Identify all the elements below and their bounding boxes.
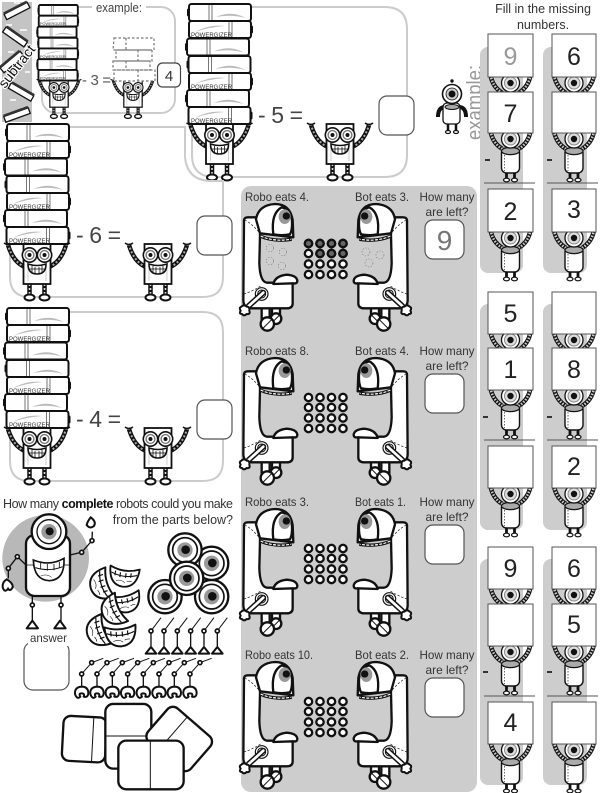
answer box (197, 400, 232, 439)
column 2: 6 - 5 = blank: 5 (567, 611, 581, 639)
question: how many complete robots: from the parts below? (113, 513, 233, 527)
body (26, 535, 70, 596)
question: how many complete robots: How many complete robots could you make (3, 497, 233, 511)
robot holding seven batteries: POWERGIZER (191, 85, 233, 91)
heading: fill in the missing numbers: Fill in the missing (495, 2, 591, 16)
parts: arms (75, 658, 212, 698)
answer box (379, 96, 414, 135)
column 2: 6 - 5 = blank (547, 547, 598, 793)
subtraction block 2 (480, 292, 598, 537)
robot holding seven batteries (36, 5, 81, 118)
grey bands (480, 47, 587, 273)
row 1: Robo eats 4, Bot eats 3: How many (420, 190, 474, 204)
robot holding seven batteries (3, 124, 71, 300)
column 1: 9 - blank = 4: 4 (504, 709, 518, 737)
column 1: 9 - blank = 4 (483, 547, 535, 793)
answer label and box: answer (30, 631, 67, 645)
row 3: Robo eats 3, Bot eats 1: are left? (426, 510, 469, 524)
robot holding seven batteries: POWERGIZER (40, 76, 66, 80)
panel: minus four (3, 308, 232, 484)
grey bands (480, 559, 587, 785)
column 1: 9 - 7 = 2 (example): 9 (504, 43, 517, 71)
column 1: 5 - 1 = blank (483, 292, 535, 537)
robot empty arms (125, 243, 191, 300)
column 2: 6 - blank = 3: 3 (567, 196, 581, 224)
panel: robots eating (240, 186, 477, 792)
row 3: Robo eats 3, Bot eats 1: How many (420, 495, 474, 509)
robot holding seven batteries: POWERGIZER (9, 337, 51, 343)
example label: example: (96, 0, 142, 15)
robot holding seven batteries: POWERGIZER (40, 22, 66, 26)
heading: fill in the missing numbers: numbers. (517, 18, 569, 32)
column 1: 9 - blank = 4: 9 (504, 555, 517, 583)
robot holding seven batteries: POWERGIZER (40, 55, 66, 59)
subtract banner (0, 1, 38, 122)
column 1: 5 - 1 = blank: 1 (504, 356, 517, 384)
answer box: 4 (158, 63, 180, 87)
column 1: 9 - 7 = 2 (example): 2 (504, 198, 517, 226)
panel: worked example (36, 0, 180, 118)
answer box: 4: 4 (165, 68, 173, 85)
parts: legs (146, 618, 227, 654)
row 3: Robo eats 3, Bot eats 1: Bot eats 1. (355, 495, 406, 509)
column 2: 6 - 5 = blank: 6 (567, 555, 581, 583)
robot empty arms (307, 123, 373, 180)
robot holding seven batteries (3, 308, 71, 484)
subtraction block 1 (480, 34, 598, 281)
icon: small robot (438, 80, 466, 134)
panel: minus six (3, 124, 232, 300)
row 2: Robo eats 8, Bot eats 4: How many (420, 344, 474, 358)
row 4: Robo eats 10, Bot eats 2: How many (420, 648, 474, 662)
parts: bodies (62, 704, 215, 789)
row 1: Robo eats 4, Bot eats 3: Bot eats 3. (355, 190, 409, 204)
answer box (197, 216, 232, 255)
row 4: Robo eats 10, Bot eats 2: Bot eats 2. (355, 648, 409, 662)
parts: eyes (148, 533, 228, 613)
row 4: Robo eats 10, Bot eats 2: are left? (426, 663, 469, 677)
example complete robot (2, 514, 95, 628)
panel: minus five (185, 4, 414, 180)
row 3: Robo eats 3, Bot eats 1: Robo eats 3. (245, 495, 309, 509)
column 1: 9 - 7 = 2 (example) (484, 34, 535, 281)
grey circle backdrop (2, 515, 89, 602)
joints (3, 517, 95, 628)
robot holding seven batteries: POWERGIZER (191, 33, 233, 39)
robot holding seven batteries: POWERGIZER (9, 389, 51, 395)
arms and legs (8, 532, 92, 622)
column 1: 5 - 1 = blank: 5 (504, 300, 517, 328)
robot holding seven batteries: POWERGIZER (9, 423, 51, 429)
row 4: Robo eats 10, Bot eats 2 (240, 648, 474, 789)
robot holding seven batteries: POWERGIZER (9, 239, 51, 245)
row 1: Robo eats 4, Bot eats 3: are left? (426, 205, 469, 219)
mouth (33, 558, 64, 581)
equation minus four: - 4 = (76, 406, 121, 432)
row 2: Robo eats 8, Bot eats 4: are left? (426, 359, 469, 373)
column 2: blank - 8 = 2: 8 (567, 356, 581, 384)
row 1: Robo eats 4, Bot eats 3 (240, 190, 474, 331)
column 2: 6 - blank = 3 (547, 34, 598, 281)
robot holding seven batteries (185, 4, 253, 180)
answer label and box (24, 631, 69, 690)
equation minus six: - 6 = (76, 222, 121, 248)
row 1: Robo eats 4, Bot eats 3: 9 (437, 225, 452, 256)
row 2: Robo eats 8, Bot eats 4 (240, 344, 474, 485)
robot holding seven batteries: POWERGIZER (191, 119, 233, 125)
parts: mouths (82, 566, 143, 650)
robot holding seven batteries: POWERGIZER (9, 205, 51, 211)
equation minus three: - 3 = (82, 72, 111, 89)
column 2: blank - 8 = 2 (547, 292, 598, 537)
equation minus five: - 5 = (258, 102, 303, 128)
row 2: Robo eats 8, Bot eats 4: Bot eats 4. (355, 344, 409, 358)
row 3: Robo eats 3, Bot eats 1 (240, 495, 474, 636)
head (32, 514, 66, 549)
row 1: Robo eats 4, Bot eats 3: Robo eats 4. (245, 190, 309, 204)
column 1: 9 - 7 = 2 (example): 7 (504, 100, 517, 128)
robot holding seven batteries: POWERGIZER (9, 153, 51, 159)
column 2: blank - 8 = 2: 2 (567, 453, 581, 481)
column 2: 6 - blank = 3: 6 (567, 43, 581, 71)
grey bands (480, 304, 587, 530)
robot empty arms (125, 427, 191, 484)
subtraction block 3 (480, 547, 598, 793)
rotated example label: example: (464, 65, 486, 140)
row 4: Robo eats 10, Bot eats 2: Robo eats 10. (245, 648, 313, 662)
robot with dashed batteries (111, 38, 155, 118)
row 2: Robo eats 8, Bot eats 4: Robo eats 8. (245, 344, 309, 358)
